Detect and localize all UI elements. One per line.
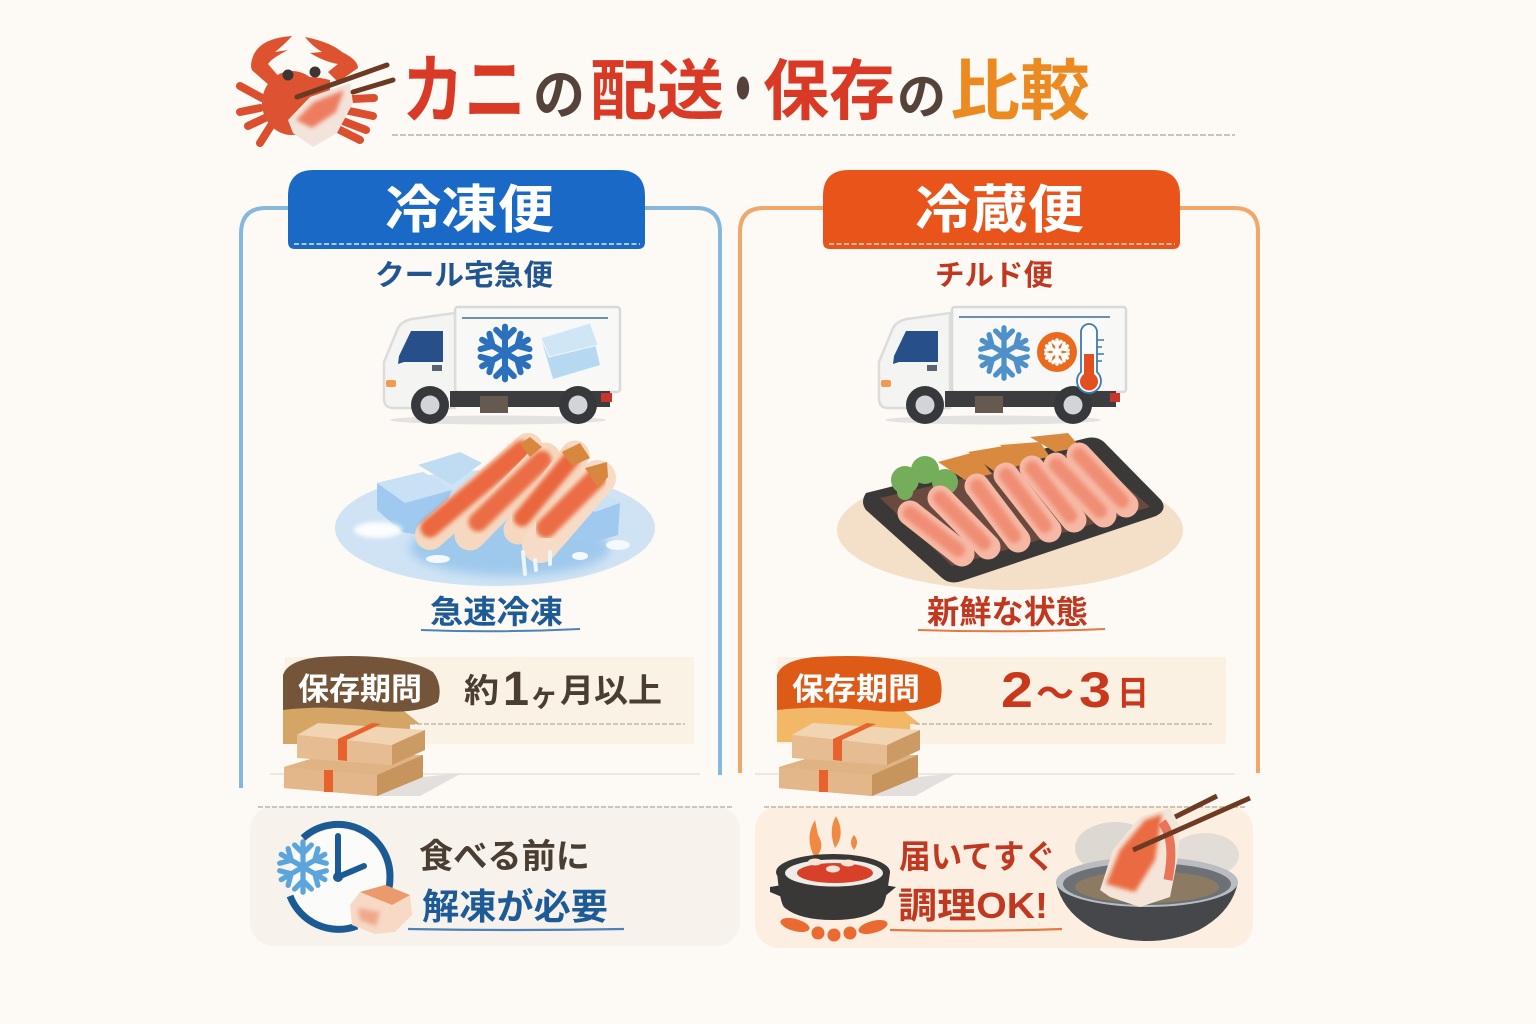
- illustration: fresh crab legs on tray: [837, 433, 1183, 590]
- header: frozen: [288, 170, 645, 249]
- panel: frozen delivery: [241, 170, 720, 796]
- icon: crab with chopsticks: [240, 36, 393, 147]
- storage period: chilled: 3: [1079, 662, 1111, 718]
- icon: pot on fire: [770, 816, 896, 942]
- header: chilled: [823, 170, 1180, 249]
- text: thaw needed: [408, 838, 624, 930]
- storage period: frozen: 約: [464, 672, 499, 709]
- title: 比較: [950, 54, 1090, 128]
- storage period: chilled: 2: [1001, 662, 1033, 718]
- panel: cook right away: [755, 796, 1253, 948]
- icon: clock with snowflake and crab cube: [277, 824, 412, 934]
- storage period: frozen: ヶ: [530, 680, 558, 713]
- label: quick freeze: 急速冷凍: [430, 594, 563, 630]
- text: cook right away: [890, 838, 1062, 931]
- text: thaw needed: 解凍が必要: [422, 886, 608, 927]
- icon: frozen truck: [384, 307, 620, 424]
- text: thaw needed: 食べる前に: [419, 838, 590, 876]
- panel: thaw before eating: [250, 806, 740, 946]
- storage period: frozen: 保存期問: [298, 672, 422, 707]
- icon: crab in bowl with chopsticks: [1056, 796, 1250, 941]
- frame: frozen: [241, 208, 720, 788]
- illustration: frozen crab legs on ice: [335, 437, 655, 586]
- subtitle: chilled delivery: チルド便: [935, 259, 1053, 292]
- storage period: chilled: 保存期問: [792, 672, 920, 707]
- subtitle: cool delivery: クール宅急便: [375, 259, 553, 292]
- panel: chilled delivery: [740, 170, 1258, 796]
- header: chilled: 冷蔵便: [915, 182, 1084, 240]
- title: の: [533, 64, 585, 126]
- icon: chilled truck: [879, 307, 1126, 424]
- title: [402, 42, 1090, 142]
- storage period: chilled: [777, 656, 1226, 744]
- storage period: chilled: 〜: [1036, 674, 1074, 716]
- icon: stacked boxes chilled: [755, 723, 1235, 796]
- title: ・: [719, 42, 767, 142]
- storage period: frozen: [283, 656, 694, 744]
- label: fresh state: 新鮮な状態: [927, 594, 1088, 630]
- header: frozen: 冷凍便: [385, 182, 554, 240]
- icon: stacked boxes frozen: [270, 723, 700, 796]
- text: cook right away: 届いてすぐ: [899, 838, 1056, 875]
- frame: chilled: [740, 208, 1258, 773]
- text: cook right away: 調理OK!: [898, 885, 1048, 926]
- storage period: frozen: 月以上: [560, 672, 662, 709]
- title: カニ: [402, 49, 526, 134]
- storage period: frozen: 1: [503, 663, 529, 716]
- title: 配送: [590, 54, 724, 128]
- title: の: [897, 69, 946, 125]
- title: 保存: [763, 54, 895, 128]
- storage period: chilled: 日: [1117, 675, 1149, 713]
